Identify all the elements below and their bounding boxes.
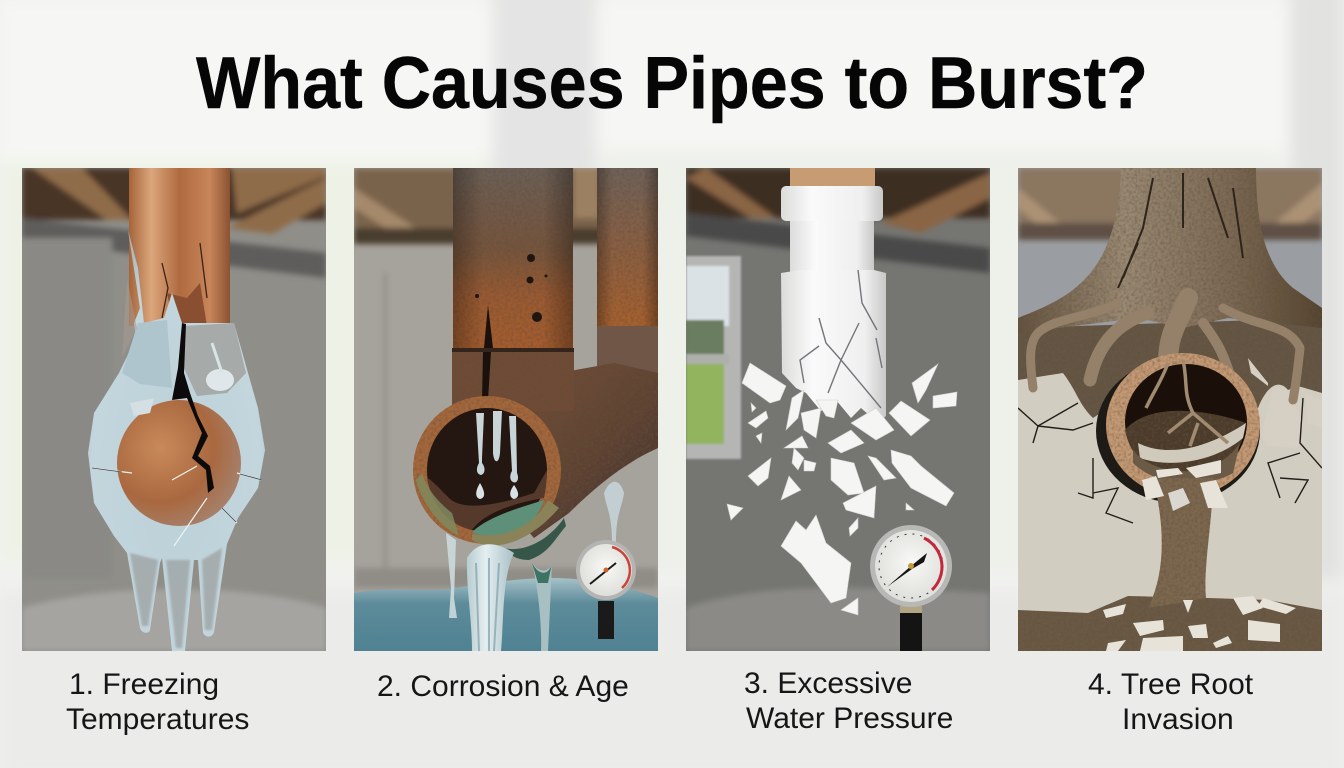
icon: ice block [88, 230, 265, 651]
icon: falling debris [1103, 460, 1296, 651]
icon: rusted elbow pipe [413, 168, 658, 560]
caption: tree root invasion [1088, 668, 1253, 736]
caption: freezing temperatures: 1. Freezing [69, 668, 219, 701]
caption: excessive water pressure [744, 667, 953, 735]
crack [172, 323, 214, 493]
panel: freezing temperatures [22, 168, 326, 651]
caption: tree root invasion: 4. Tree Root [1088, 668, 1253, 701]
caption: freezing temperatures: Temperatures [66, 703, 249, 736]
icon: white pipe cracked [781, 186, 886, 423]
icon: rusted back pipe [597, 168, 658, 373]
icon: tree trunk with roots [1018, 168, 1322, 400]
wall chunks [1248, 358, 1322, 448]
basement backdrop [354, 168, 658, 651]
cracked wall [1018, 363, 1322, 613]
panel: excessive water pressure [686, 168, 990, 651]
icon: pressure gauge [576, 540, 636, 639]
caption: corrosion and age: 2. Corrosion & Age [377, 670, 629, 703]
panel: tree root invasion [1018, 168, 1322, 651]
basement backdrop [686, 168, 990, 651]
soil floor [1018, 596, 1322, 651]
panel: corrosion and age [354, 168, 658, 651]
icon: copper stub [790, 168, 875, 188]
water pool [354, 578, 658, 651]
title: What Causes Pipes to Burst? [196, 43, 1148, 124]
icon: window [686, 256, 741, 459]
caption: freezing temperatures [66, 668, 249, 736]
icon: pressure gauge [870, 525, 952, 651]
soil band [1018, 318, 1322, 418]
caption: excessive water pressure: Water Pressure [746, 702, 953, 735]
icon: water drips and stream [446, 411, 552, 651]
icon: shattered fragments [727, 363, 957, 615]
icon: copper pipe [129, 168, 230, 326]
icon: icicles [130, 548, 222, 648]
icon: broken pipe ring [1096, 353, 1260, 503]
basement backdrop [22, 168, 326, 651]
caption: tree root invasion: Invasion [1122, 703, 1234, 736]
icon: back drip [604, 482, 624, 543]
caption: excessive water pressure: 3. Excessive [744, 667, 912, 700]
basement backdrop [1018, 168, 1322, 651]
